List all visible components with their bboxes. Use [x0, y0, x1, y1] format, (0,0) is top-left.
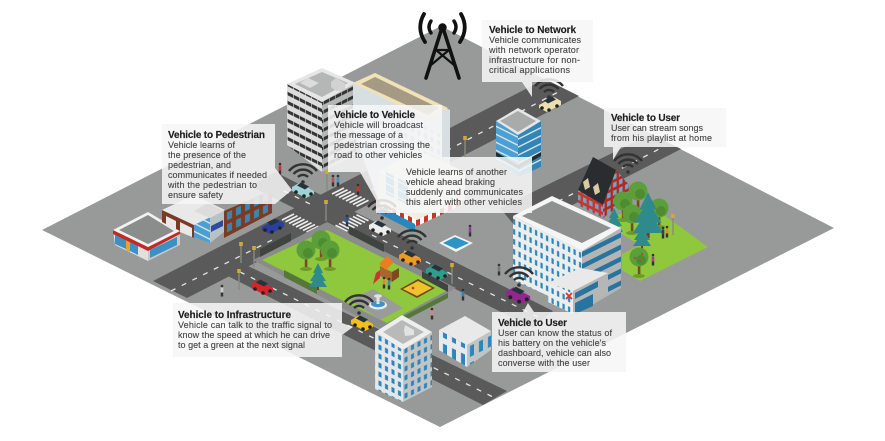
callout: vehicle to network: critical applications — [489, 65, 570, 75]
callout: vehicle to pedestrian: Vehicle learns of — [168, 140, 235, 150]
car: yellow taxi — [351, 316, 373, 331]
callout: vehicle to network: Vehicle to Network — [489, 25, 576, 36]
callout: vehicle to user (home) — [604, 108, 726, 160]
small park and house lawn — [617, 205, 708, 281]
fences — [260, 226, 448, 328]
car: white SUV — [369, 220, 391, 236]
callout: vehicle to user (dashboard): User can know the status of — [498, 328, 612, 338]
car: red — [251, 280, 273, 295]
blue office building — [496, 108, 541, 177]
sandbox — [400, 279, 435, 298]
callout: vehicle to infrastructure: Vehicle can talk to the traffic signal to — [178, 320, 332, 330]
car: teal — [426, 264, 448, 280]
cream building — [353, 73, 450, 200]
playground — [373, 256, 399, 290]
low apartment block — [439, 316, 491, 367]
fountain plaza — [350, 289, 403, 320]
callout: vehicle to vehicle: the message of a — [334, 130, 403, 140]
callout: vehicle to network: Vehicle communicates — [489, 35, 582, 45]
callout: vehicle to user (home): User can stream songs — [611, 123, 704, 133]
callout: vehicle to pedestrian: communicates if needed — [168, 170, 267, 180]
callout: vehicle to pedestrian — [162, 124, 292, 204]
callout: vehicle to pedestrian: Vehicle to Pedestrian — [168, 130, 265, 141]
callout: vehicle ahead braking: vehicle ahead braking — [406, 177, 495, 187]
callout: vehicle to pedestrian: with the pedestrian to — [167, 180, 257, 190]
callout: vehicle to pedestrian: pedestrian, and — [168, 160, 231, 170]
car: cyan — [292, 182, 314, 198]
wifi signal icons — [289, 79, 642, 315]
callout: vehicle ahead braking: this alert with other vehicles — [406, 197, 522, 207]
zebra crossings — [282, 188, 368, 233]
callout: vehicle to vehicle — [328, 105, 442, 200]
callout: vehicle to user (dashboard): Vehicle to User — [498, 318, 567, 329]
fire station — [113, 212, 180, 261]
house trees — [605, 182, 675, 278]
callout: vehicle to vehicle: Vehicle to Vehicle — [334, 110, 415, 121]
callout: vehicle to vehicle: Vehicle will broadcast — [334, 120, 423, 130]
callout: vehicle to infrastructure: know the speed at which he can drive — [178, 330, 330, 340]
van: purple — [506, 287, 530, 304]
police station — [162, 190, 272, 243]
house — [578, 157, 629, 218]
callout: vehicle to user (dashboard): dashboard, vehicle can also — [498, 348, 611, 358]
callout: vehicle to user (home): Vehicle to User — [611, 113, 680, 124]
residential tower — [375, 315, 432, 402]
mall with awning — [376, 150, 465, 232]
icon: network tower — [420, 14, 465, 78]
roads — [153, 79, 681, 405]
callout: vehicle to network: with network operator — [488, 45, 579, 55]
callout: vehicle ahead braking: Vehicle learns of another — [406, 167, 507, 177]
park trees — [296, 230, 340, 290]
street furniture and pedestrians — [221, 136, 500, 320]
gray office tower — [287, 68, 356, 172]
callout: vehicle to infrastructure — [173, 303, 353, 357]
callout: vehicle to pedestrian: ensure safety — [168, 190, 224, 200]
car: beige — [539, 96, 561, 112]
car: police — [262, 218, 284, 234]
callout: vehicle to user (dashboard) — [492, 303, 626, 372]
large office building — [513, 196, 621, 311]
vehicles — [251, 96, 561, 331]
park lawn — [253, 222, 456, 330]
callout: vehicle to vehicle: road to other vehicles — [334, 150, 422, 160]
callout: vehicle to infrastructure: to get a green at the next signal — [178, 340, 305, 350]
callout: vehicle to network — [482, 20, 593, 97]
callout: vehicle to network: infrastructure for non- — [489, 55, 580, 65]
callout: vehicle to user (dashboard): his battery on the vehicle's — [498, 338, 606, 348]
callout: vehicle ahead braking — [376, 157, 532, 213]
car: orange — [399, 250, 421, 266]
hospital wing — [548, 268, 608, 314]
callout: vehicle to pedestrian: the presence of the — [168, 150, 246, 160]
fountain — [369, 294, 387, 310]
pool — [439, 235, 473, 252]
callout: vehicle to infrastructure: Vehicle to Infrastructure — [178, 310, 291, 321]
callout: vehicle ahead braking: suddenly and communicates — [406, 187, 524, 197]
callout: vehicle to user (dashboard): converse with the user — [498, 358, 590, 368]
callout: vehicle to user (home): from his playlist at home — [611, 133, 712, 143]
callout: vehicle to vehicle: pedestrian crossing the — [334, 140, 430, 150]
